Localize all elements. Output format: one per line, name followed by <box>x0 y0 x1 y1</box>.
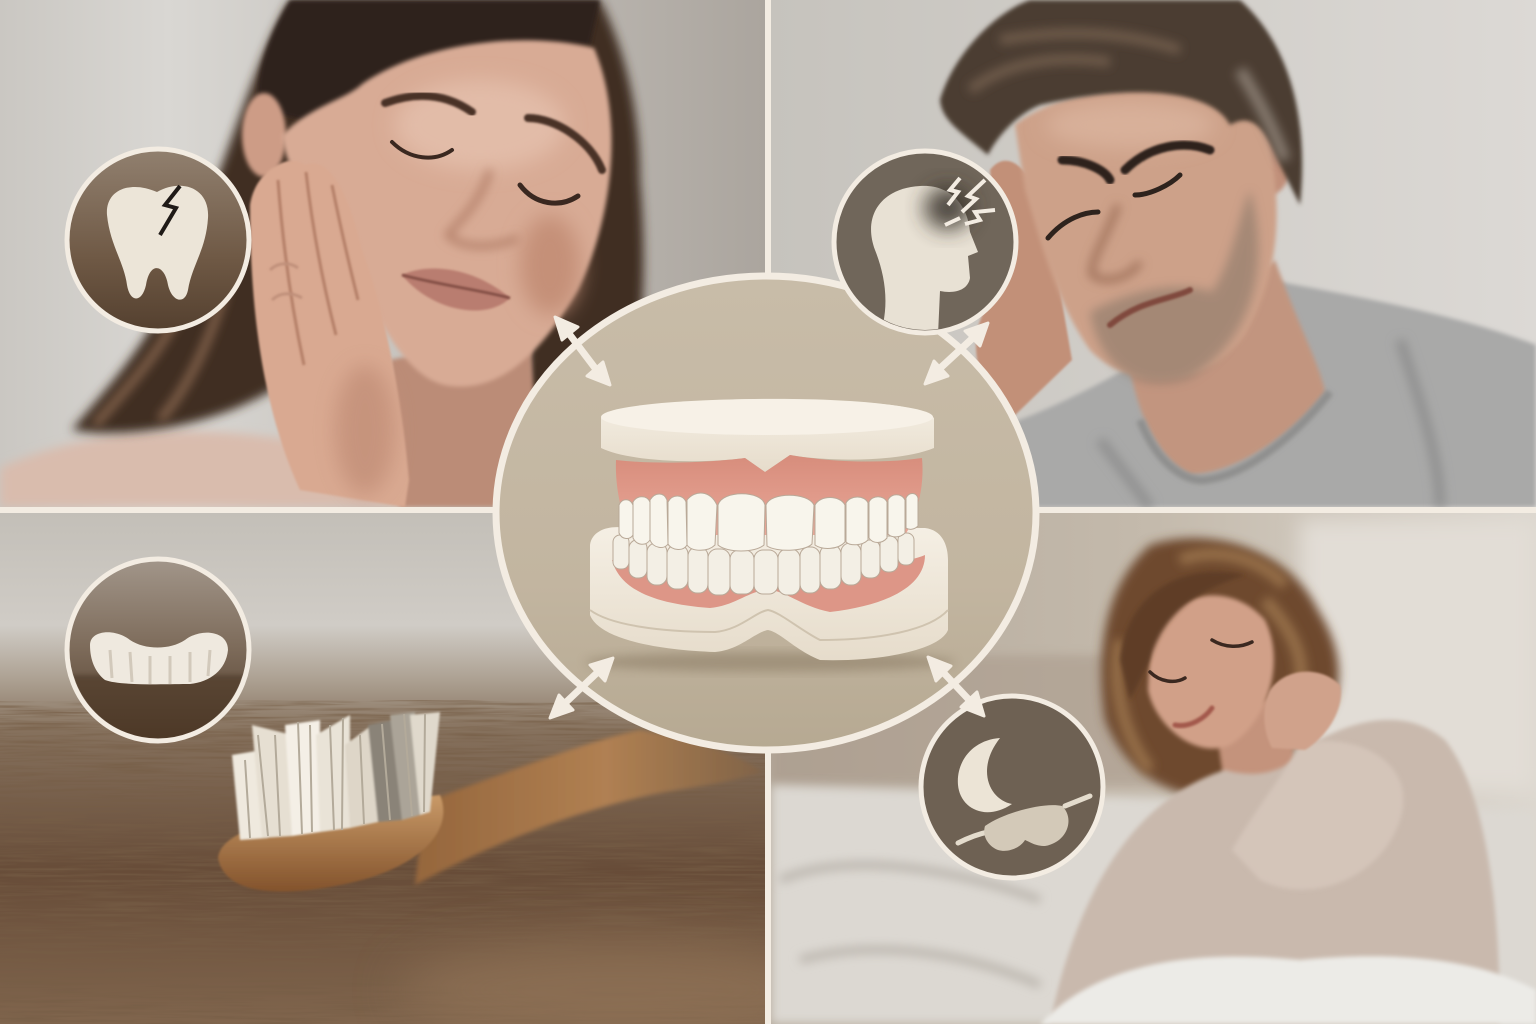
icon: worn night guard <box>60 559 260 750</box>
neck <box>1130 260 1325 474</box>
t-shirt <box>990 280 1536 507</box>
face <box>282 40 612 387</box>
sweater <box>1050 720 1500 1024</box>
hair <box>72 0 643 490</box>
hand on neck <box>1264 672 1341 750</box>
mouth <box>1110 290 1190 325</box>
neck <box>1215 690 1295 790</box>
icon: head with pain burst <box>834 151 1016 335</box>
lips <box>402 269 510 311</box>
arrow: jaw pain link <box>555 317 610 385</box>
ear <box>242 93 286 177</box>
nose <box>1092 205 1140 280</box>
upper gum <box>616 455 923 535</box>
blanket <box>1040 956 1536 1024</box>
raised arm <box>1232 741 1404 890</box>
hand and wrist <box>976 161 1072 420</box>
face <box>1015 87 1277 379</box>
panel: woman with jaw pain <box>0 0 765 507</box>
icon: moon and sleep mask <box>921 696 1103 878</box>
sweater <box>0 431 420 507</box>
upper plate <box>601 399 934 472</box>
icon: cracked tooth <box>67 149 249 331</box>
eyes <box>392 142 452 158</box>
bristles <box>232 712 440 840</box>
panel: man with headache <box>771 0 1536 507</box>
hair <box>940 0 1302 205</box>
lower teeth <box>613 533 914 595</box>
panel: central denture model <box>496 276 1036 750</box>
brows <box>1062 160 1110 180</box>
arrow: sleep link <box>928 657 984 716</box>
neck <box>392 350 536 507</box>
arrow: headache link <box>925 323 988 384</box>
panel: worn toothbrush on wood <box>0 513 840 1024</box>
upper teeth <box>619 493 918 551</box>
collar <box>1140 392 1330 480</box>
bristle strands <box>245 714 425 838</box>
hair back <box>1101 538 1339 797</box>
toothbrush head <box>218 795 443 892</box>
lower gum <box>612 555 925 612</box>
eyes <box>1048 212 1098 238</box>
nose <box>448 170 518 246</box>
panel: woman with neck pain in bed <box>771 513 1536 1024</box>
stubble <box>1090 190 1258 383</box>
ear <box>1267 138 1289 195</box>
arrow: tooth wear link <box>550 658 613 718</box>
hand <box>250 161 409 507</box>
bed <box>771 785 1536 1024</box>
shadow <box>585 652 955 672</box>
brows <box>385 96 472 112</box>
lower base <box>590 527 948 660</box>
hair front <box>1120 572 1245 700</box>
toothbrush handle <box>415 730 762 885</box>
face <box>1148 595 1274 749</box>
